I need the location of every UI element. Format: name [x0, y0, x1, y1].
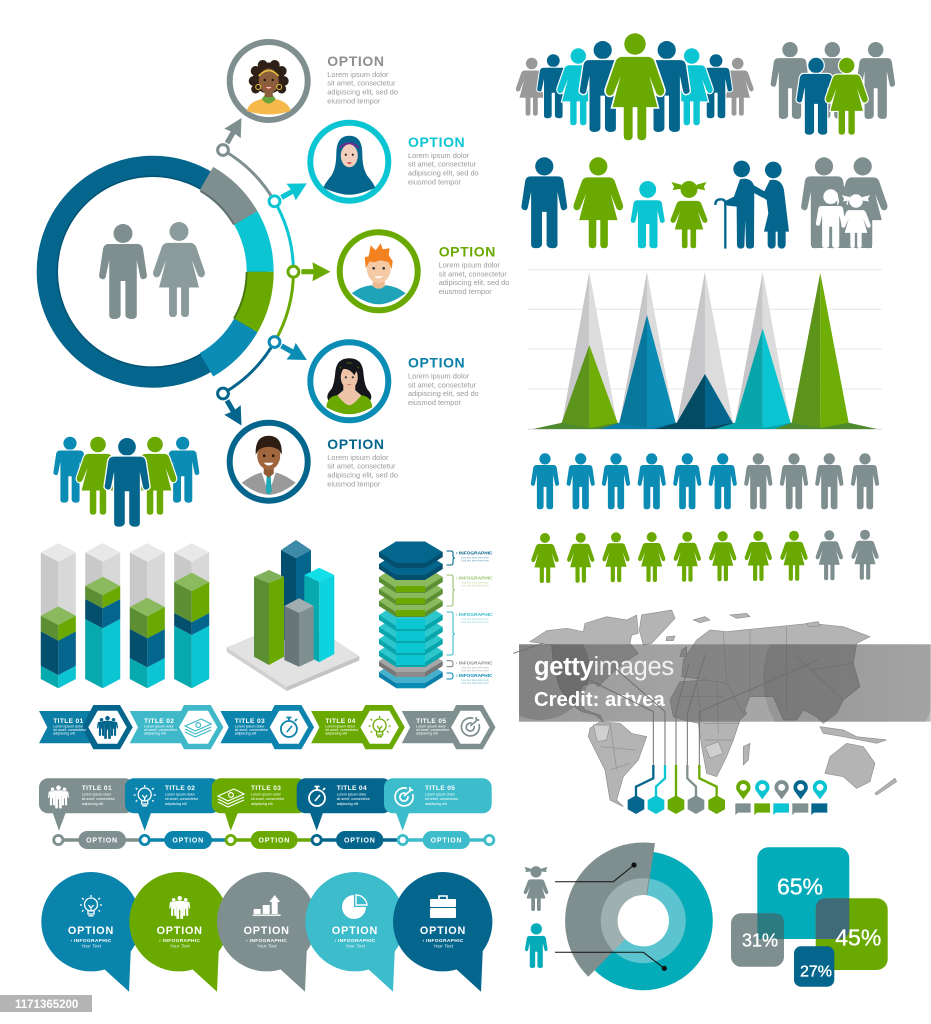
infographic labels: › INFOGRAPHIC — [456, 576, 493, 582]
bubble 4: › INFOGRAPHIC — [334, 938, 376, 944]
chart: cone bar chart — [528, 270, 882, 429]
icon: people group left — [53, 437, 199, 527]
step 4: TITLE 04 — [325, 718, 356, 725]
chart: hexagon layer stack — [379, 542, 493, 688]
infographic labels: Your text here here here — [461, 681, 489, 685]
tab titles: adipiscing elit — [337, 802, 358, 806]
icon: crowd top right — [516, 33, 754, 140]
tab titles: Lorem ipsum dolor — [82, 792, 112, 796]
chart: percentage squares: 31% — [742, 930, 778, 950]
step 3: adipiscing elit — [235, 732, 256, 736]
tab titles: sit amet, consectetur — [165, 797, 199, 801]
bubble 1: Your Text — [81, 944, 102, 950]
chart: percentage squares: 65% — [777, 874, 823, 900]
infographic labels: Your text here here here — [461, 580, 489, 584]
text: option 2 — [408, 134, 479, 186]
step 5: Lorem ipsum dolor — [416, 724, 447, 728]
text: option 1: adipiscing elit, sed do — [327, 88, 398, 97]
avatar: woman in hijab — [310, 123, 388, 201]
text: option 3 — [439, 244, 509, 296]
text: option 1: eiusmod tempor — [327, 96, 381, 106]
column 3 — [130, 543, 165, 688]
infographic labels: Your text here here here — [461, 558, 489, 562]
text: option 5: Lorem ipsum dolor — [327, 453, 389, 462]
step 2: adipiscing elit — [144, 732, 166, 736]
chart: percentage squares — [731, 847, 888, 987]
bubble 1 — [41, 872, 141, 992]
text: option 3: sit amet, consectetur — [439, 269, 507, 278]
text: option 2: sit amet, consectetur — [408, 160, 477, 169]
bubble 5 — [393, 872, 492, 992]
text: option 3: OPTION — [439, 244, 496, 260]
bubble 2 — [129, 872, 229, 992]
icon: central man and woman — [99, 222, 205, 319]
bubble 3: OPTION — [244, 925, 290, 937]
infographic labels — [456, 550, 493, 685]
bubble 3: Your Text — [257, 944, 277, 950]
chart: isometric 3d bars on platform — [227, 540, 359, 691]
column 4 — [174, 543, 209, 688]
tab titles: sit amet, consectetur — [82, 797, 116, 801]
tab titles: Lorem ipsum dolor — [251, 792, 282, 796]
tab titles: adipiscing elit — [425, 802, 447, 806]
bubble 2: OPTION — [157, 925, 203, 937]
step 1: sit amet, consectetur — [53, 728, 87, 732]
timeline pills: OPTION — [172, 838, 204, 845]
icon: girl legend — [524, 866, 548, 911]
timeline pills: OPTION — [258, 838, 290, 845]
tab titles — [82, 785, 459, 806]
brackets — [446, 551, 455, 679]
watermark band: Credit: artvea — [534, 689, 665, 711]
column 1 — [41, 543, 76, 688]
infographic labels: › INFOGRAPHIC — [456, 612, 493, 618]
step 4 — [311, 705, 405, 749]
tab titles: adipiscing elit — [165, 802, 187, 806]
text: option 4 — [408, 355, 479, 407]
icon: family — [801, 157, 887, 248]
map pins — [738, 782, 825, 799]
connector arcs and arrows — [218, 113, 330, 430]
avatar: man in suit — [230, 423, 308, 501]
column 2 — [85, 543, 120, 688]
step 2 — [130, 705, 223, 749]
icon row: women pictogram 8 of 10 — [531, 530, 879, 583]
avatar: man with orange hair — [340, 232, 418, 310]
stock id label — [0, 995, 92, 1012]
tab titles: sit amet, consectetur — [251, 797, 285, 801]
icon: group of four adults — [771, 42, 895, 135]
step 5: sit amet, consectetur — [416, 728, 450, 732]
step 4: adipiscing elit — [325, 732, 347, 736]
icon: girl — [671, 181, 707, 248]
text: option 2: Lorem ipsum dolor — [408, 151, 470, 160]
text: option 5: eiusmod tempor — [327, 480, 381, 488]
infographic labels: › INFOGRAPHIC — [456, 660, 493, 666]
bubble 5: › INFOGRAPHIC — [422, 938, 464, 944]
text: option 4: eiusmod tempor — [408, 398, 462, 407]
bubble 1: › INFOGRAPHIC — [70, 938, 112, 944]
step 5 — [402, 705, 496, 749]
text: option 1: OPTION — [327, 53, 385, 69]
panel: tabbed timeline — [39, 778, 494, 849]
tab icons — [48, 785, 413, 808]
bubble 3 — [217, 872, 316, 992]
text: option 2: OPTION — [408, 134, 465, 150]
text: option 1: Lorem ipsum dolor — [327, 70, 389, 79]
bubble 5: Your Text — [433, 944, 454, 950]
tab titles: TITLE 04 — [337, 785, 367, 792]
icon: boy — [631, 181, 665, 248]
avatar: woman with curly hair — [230, 42, 308, 120]
text: option 3: adipiscing elit, sed do — [439, 278, 509, 287]
map flags — [735, 803, 827, 815]
bubble 5: OPTION — [420, 925, 466, 937]
step 2: sit amet, consectetur — [144, 728, 178, 732]
step 3: sit amet, consectetur — [235, 728, 269, 732]
infographic labels: › INFOGRAPHIC — [456, 550, 493, 556]
panel: speech bubble options — [41, 872, 492, 992]
tab titles: TITLE 01 — [82, 785, 112, 792]
step 1: TITLE 01 — [53, 718, 84, 725]
step 1 — [39, 705, 133, 749]
icon row: men pictogram 6 of 10 — [531, 453, 879, 509]
watermark band: gettyimages — [534, 653, 674, 681]
step 5: adipiscing elit — [416, 732, 438, 736]
step 4: sit amet, consectetur — [325, 728, 359, 732]
tab titles: Lorem ipsum dolor — [165, 792, 196, 796]
bubble 4: OPTION — [332, 925, 378, 937]
chart: isometric stacked columns — [41, 543, 209, 688]
step 1: Lorem ipsum dolor — [53, 724, 84, 728]
watermark band — [519, 644, 931, 722]
text: option 5: sit amet, consectetur — [327, 462, 396, 471]
icon: boy legend — [525, 923, 548, 968]
infographic labels: Your text here here here — [461, 620, 489, 624]
text: option 4: Lorem ipsum dolor — [408, 371, 470, 380]
tab titles: adipiscing elit — [251, 802, 273, 806]
step 5: TITLE 05 — [416, 718, 446, 725]
infographic labels: Your text here here here — [461, 617, 489, 621]
timeline pills: OPTION — [86, 838, 118, 845]
tab titles: sit amet, consectetur — [425, 797, 459, 801]
text: option 4: sit amet, consectetur — [408, 380, 477, 389]
chart: percentage squares: 45% — [835, 924, 881, 950]
tab titles: Lorem ipsum dolor — [337, 792, 367, 796]
text: option 3: eiusmod tempor — [439, 287, 492, 296]
text: option 4: adipiscing elit, sed do — [408, 389, 479, 398]
bubble 2: Your Text — [170, 944, 190, 950]
bubble 1: OPTION — [68, 925, 114, 937]
tab titles: adipiscing elit — [82, 802, 103, 806]
tab titles: TITLE 02 — [165, 785, 195, 792]
bubble 4: Your Text — [345, 944, 366, 950]
chart: percentage squares: 27% — [800, 963, 832, 980]
text: option 2: adipiscing elit, sed do — [408, 169, 479, 178]
step 2: Lorem ipsum dolor — [144, 724, 175, 728]
infographic labels: Your text here here here — [461, 678, 489, 682]
timeline pills: OPTION — [344, 838, 376, 845]
text: option 5: adipiscing elit, sed do — [327, 471, 398, 480]
step 3: Lorem ipsum dolor — [235, 724, 265, 728]
stock id label: 1171365200 — [15, 999, 78, 1011]
tab titles: TITLE 05 — [425, 785, 455, 792]
text: option 4: OPTION — [408, 355, 465, 371]
map: world map — [530, 610, 897, 807]
tab titles: sit amet, consectetur — [337, 797, 371, 801]
infographic labels: Your text here here here — [461, 668, 489, 672]
text: option 3: Lorem ipsum dolor — [439, 260, 500, 269]
map legs and hexagon markers — [628, 765, 725, 814]
map connector lines — [513, 643, 818, 765]
step 4: Lorem ipsum dolor — [325, 724, 356, 728]
timeline pills — [78, 831, 470, 849]
tab titles: Lorem ipsum dolor — [425, 792, 456, 796]
infographic labels: Your text here here here — [461, 556, 489, 560]
text: option 5 — [327, 436, 398, 488]
icon: elderly couple — [715, 161, 789, 249]
infographic labels: › INFOGRAPHIC — [456, 673, 493, 679]
text: option 2: eiusmod tempor — [408, 178, 462, 186]
timeline — [54, 835, 494, 845]
panel: central ring chart — [47, 166, 274, 377]
icon: woman — [574, 157, 623, 248]
step 3 — [220, 705, 314, 749]
tabs — [39, 778, 492, 831]
infographic labels: Your text here here here — [461, 666, 489, 670]
text: option 5: OPTION — [327, 436, 385, 452]
text: option 1: sit amet, consectetur — [327, 79, 396, 88]
text: option 1 — [327, 53, 398, 106]
icon: man — [521, 157, 567, 248]
tab titles: TITLE 03 — [251, 785, 281, 792]
timeline pills: OPTION — [431, 838, 462, 845]
avatar: woman with long black hair — [310, 342, 388, 420]
step 1: adipiscing elit — [53, 732, 75, 736]
bubble 4 — [305, 872, 405, 992]
chart: donut gender split — [555, 842, 713, 990]
infographic labels: Your text here here here — [461, 584, 489, 588]
bubble 3: › INFOGRAPHIC — [246, 938, 287, 944]
bubble 2: › INFOGRAPHIC — [159, 938, 200, 944]
panel: hexagon ribbon steps — [39, 705, 496, 749]
step 3: TITLE 03 — [235, 718, 265, 725]
step 2: TITLE 02 — [144, 718, 174, 725]
